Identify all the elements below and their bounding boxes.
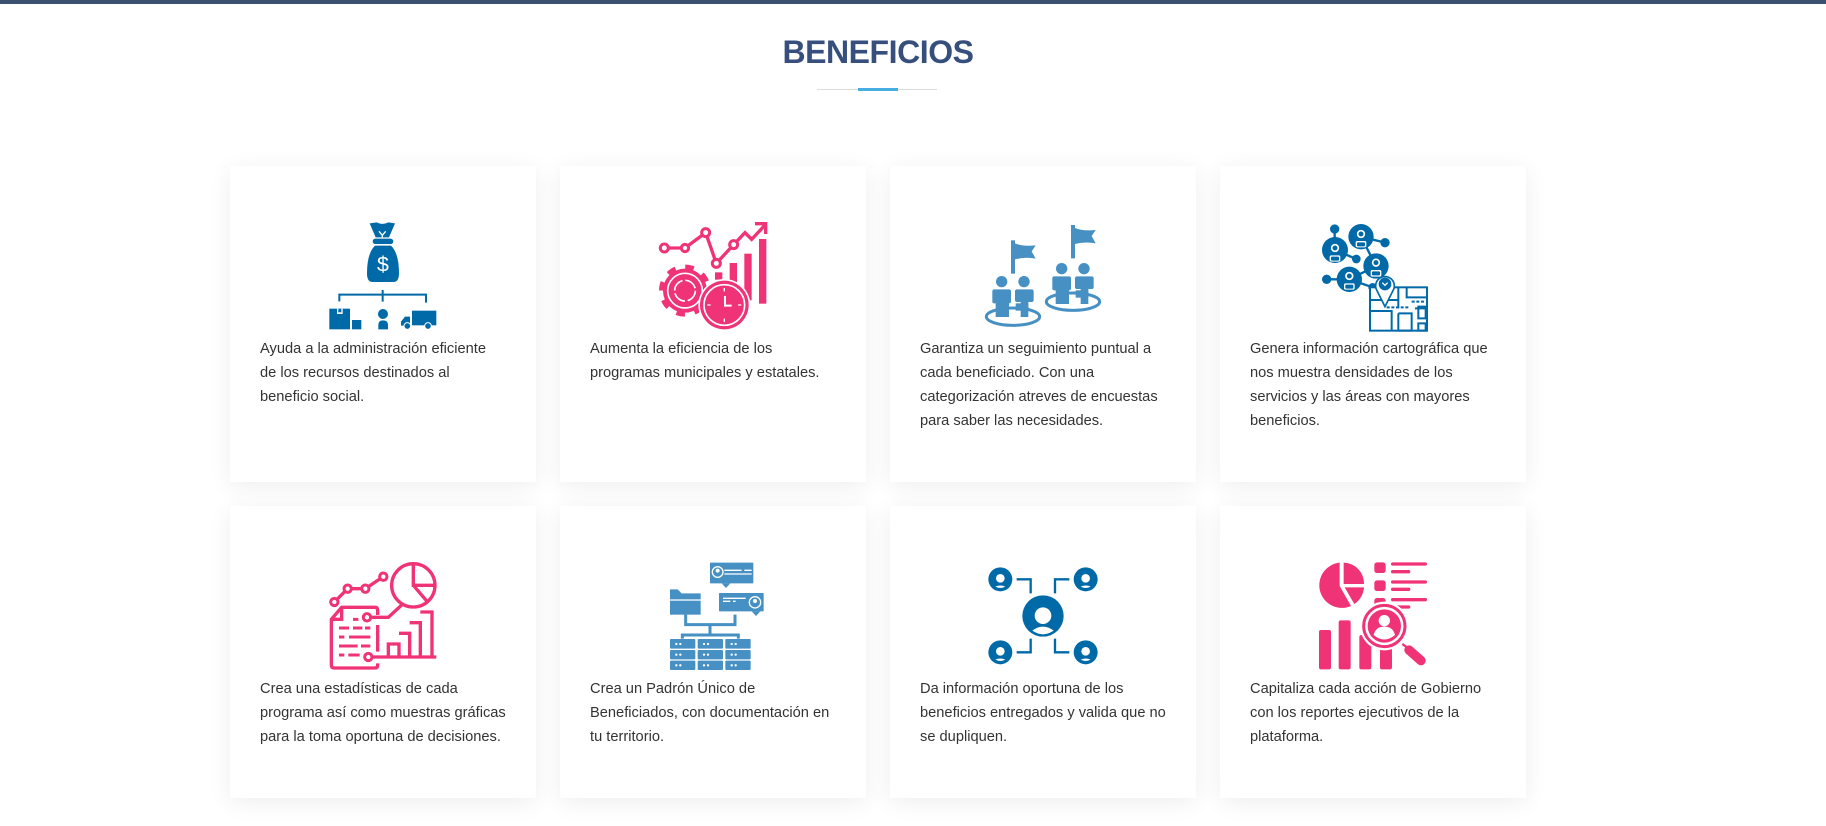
text block: para saber las necesidades. <box>920 413 1103 429</box>
text block: cada beneficiado. Con una <box>920 365 1094 381</box>
text block: nos muestra densidades de los <box>1250 365 1453 381</box>
text block: se dupliquen. <box>920 729 1007 745</box>
text block <box>1250 681 1481 745</box>
panel: padrón único <box>560 506 866 798</box>
icon: money bag with distribution: $ <box>377 253 389 277</box>
text block <box>920 341 1158 429</box>
panel: eficiencia <box>560 166 866 482</box>
panel: reportes ejecutivos <box>1220 506 1526 798</box>
text block: Capitaliza cada acción de Gobierno <box>1250 681 1481 697</box>
icon: money bag with distribution <box>329 222 436 330</box>
panel: información oportuna <box>890 506 1196 798</box>
text block <box>260 341 486 405</box>
icon: network and map pin <box>1322 224 1428 332</box>
text block: programas municipales y estatales. <box>590 365 819 381</box>
icon: growth chart, gear and clock <box>658 222 768 330</box>
text block: beneficios entregados y valida que no <box>920 705 1166 721</box>
text block: Aumenta la eficiencia de los <box>590 341 772 357</box>
text block <box>260 681 506 745</box>
panel: estadísticas <box>230 506 536 798</box>
text block: Crea un Padrón Único de <box>590 681 755 697</box>
text block: Crea una estadísticas de cada <box>260 681 458 697</box>
panel: recursos <box>230 166 536 482</box>
text block: servicios y las áreas con mayores <box>1250 389 1470 405</box>
text block: beneficios. <box>1250 413 1320 429</box>
text block <box>920 681 1166 745</box>
text block: para la toma oportuna de decisiones. <box>260 729 501 745</box>
icon: document, pie and bar chart <box>329 562 437 670</box>
text block: Da información oportuna de los <box>920 681 1123 697</box>
top bar <box>0 0 1826 4</box>
text block: categorización atreves de encuestas <box>920 389 1158 405</box>
text block: plataforma. <box>1250 729 1323 745</box>
title: BENEFICIOS <box>782 34 974 70</box>
text block: Garantiza un seguimiento puntual a <box>920 341 1151 357</box>
text block <box>1250 341 1488 429</box>
icon: folder, chat bubbles and servers <box>670 562 764 670</box>
text block: tu territorio. <box>590 729 664 745</box>
text block: Beneficiados, con documentación en <box>590 705 829 721</box>
text block <box>590 680 829 745</box>
title underline <box>817 88 937 91</box>
text block: con los reportes ejecutivos de la <box>1250 705 1459 721</box>
text block: Genera información cartográfica que <box>1250 341 1488 357</box>
text block: Ayuda a la administración eficiente <box>260 341 486 357</box>
icon: reports and magnifier <box>1319 562 1427 670</box>
panel: cartografía <box>1220 166 1526 482</box>
text block: beneficio social. <box>260 389 364 405</box>
text block <box>590 341 819 381</box>
icon: flag groups of people <box>984 225 1102 327</box>
text block: de los recursos destinados al <box>260 365 450 381</box>
text block: programa así como muestras gráficas <box>260 705 506 721</box>
panel: seguimiento <box>890 166 1196 482</box>
icon: connected users <box>988 567 1098 664</box>
